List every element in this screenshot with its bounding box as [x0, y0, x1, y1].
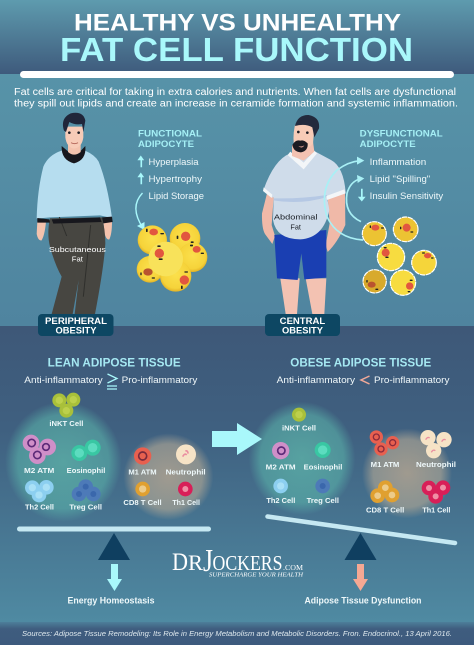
intro text: they spill out lipids and create an increase in ceramide formation and systemic inflammation.: [14, 98, 458, 110]
panel: central obesity figure: [262, 115, 364, 314]
panel: peripheral obesity figure: [37, 113, 113, 314]
list: functional effects: Hyperplasia: [148, 157, 199, 168]
cell: Treg: Treg Cell: [69, 502, 102, 511]
cells: obese: [249, 402, 456, 518]
list: functional effects: [148, 157, 204, 202]
list: dysfunctional effects: Insulin Sensitivity: [370, 191, 443, 202]
logo: DrJockers: J: [203, 542, 213, 578]
cells: lean: [5, 393, 213, 522]
panel: dysfunctional adipocyte: [358, 128, 443, 202]
cell: Th2: [25, 480, 54, 511]
panel: obese adipose tissue: [249, 358, 456, 518]
cell: neutrophil: [166, 444, 206, 476]
cell: neutrophil: Neutrophil: [416, 460, 456, 469]
figure: lean man: [37, 113, 113, 314]
cell: M1 ATM: [128, 447, 157, 476]
heading: functional adipocyte: [138, 128, 202, 150]
cell: neutrophil: [416, 430, 456, 469]
cell: Treg: [69, 479, 102, 511]
cell: Th2: Th2 Cell: [25, 502, 54, 511]
balance text: obese: Anti-inflammatory: [277, 375, 355, 386]
list: dysfunctional effects: Lipid "Spilling": [370, 174, 430, 185]
seesaw: obese tilted: [268, 516, 455, 560]
sources: Sources: Adipose Tissue Remodeling: Its Role in Energy Metabolism and Metabolic Disorders. Fron. Endocrinol., 13 April 2016.: [22, 629, 452, 638]
glow: anti-inflammatory: [249, 402, 355, 515]
cell: Th1: Th1 Cell: [172, 498, 200, 507]
figure: obese man: [262, 115, 346, 314]
badge: central obesity: [265, 314, 340, 336]
badge: peripheral obesity: OBESITY: [56, 326, 96, 336]
arrow: to adipose tissue dysfunction: [353, 564, 368, 591]
panel: functional adipocyte: [136, 128, 204, 230]
panel: lean adipose tissue: [5, 358, 213, 522]
icon: greater than or equal: [107, 374, 117, 389]
footer band: [0, 622, 474, 645]
list: dysfunctional effects: [370, 157, 443, 202]
logo: DrJockers: [172, 542, 304, 578]
cell: Treg: [307, 479, 339, 505]
cell: M1 ATM: M1 ATM: [128, 467, 157, 476]
cell: iNKT: iNKT Cell: [49, 419, 83, 428]
glow: anti-inflammatory: [5, 402, 122, 522]
balance text: lean: [24, 375, 198, 386]
badge: central obesity: OBESITY: [282, 326, 323, 336]
glow: pro-inflammatory: [362, 428, 452, 518]
intro text: Fat cells are critical for taking in extra calories and nutrients. When fat cells are dysfunctional: [14, 87, 456, 98]
icon: up arrow: [138, 173, 144, 184]
list: functional effects: Hypertrophy: [148, 174, 202, 185]
cell: Th1: [172, 482, 200, 507]
list: functional effects: Lipid Storage: [148, 191, 204, 202]
heading: functional adipocyte: ADIPOCYTE: [138, 139, 194, 150]
cell: Th1: [422, 480, 450, 514]
arrow: curved to healthy fat cells: [136, 193, 144, 230]
icon: unhealthy fat cells: [362, 217, 436, 295]
title line 2: FAT CELL FUNCTION: [60, 31, 413, 68]
balance text: lean: Pro-inflammatory: [122, 375, 198, 386]
cell: M2 ATM: M2 ATM: [266, 462, 296, 471]
label: abdominal fat: [274, 213, 318, 231]
cell: CD8 T: [366, 480, 404, 514]
label: abdominal fat: Fat: [290, 222, 301, 231]
cell: iNKT: [49, 393, 83, 428]
balance text: obese: Pro-inflammatory: [374, 375, 450, 386]
cell: M2 ATM: [266, 442, 296, 471]
title line 1: HEALTHY VS UNHEALTHY: [74, 10, 401, 36]
cell: neutrophil: Neutrophil: [166, 467, 206, 476]
icon: up arrow: [138, 156, 144, 167]
cell: M1 ATM: M1 ATM: [371, 460, 399, 469]
cell: CD8 T: [123, 482, 162, 507]
label: adipose tissue dysfunction: Adipose Tissue Dysfunction: [304, 596, 422, 606]
cell: eosinophil: [304, 442, 342, 471]
arrow: lean to obese: [212, 423, 262, 455]
cell: eosinophil: [67, 440, 105, 475]
icon: healthy fat cell cluster: [137, 223, 207, 292]
heading: dysfunctional adipocyte: DYSFUNCTIONAL: [360, 128, 443, 140]
balance text: obese: [277, 375, 450, 386]
logo: DrJockers: OCKERS: [212, 551, 282, 575]
cell: eosinophil: Eosinophil: [67, 466, 105, 475]
label: energy homeostasis: Energy Homeostasis: [68, 596, 154, 606]
cell: Th2: [266, 479, 295, 505]
heading: dysfunctional adipocyte: [360, 128, 443, 150]
logo: DrJockers: .COM: [283, 564, 304, 572]
icon: less than: [361, 376, 370, 384]
title: [60, 10, 413, 68]
heading: obese adipose tissue: OBESE ADIPOSE TISSUE: [290, 358, 432, 370]
badge: peripheral obesity: PERIPHERAL: [45, 316, 108, 326]
cell: iNKT: iNKT Cell: [282, 424, 316, 433]
arrows: fat cells to effects: [324, 161, 363, 240]
cell: Th1: Th1 Cell: [422, 505, 450, 514]
seesaw: lean balanced: [17, 526, 211, 560]
label: subcutaneous fat: [49, 245, 106, 263]
cell: M2 ATM: M2 ATM: [24, 466, 54, 475]
arrow: to energy homeostasis: [107, 564, 122, 591]
intro text: [14, 87, 458, 110]
list: dysfunctional effects: Inflammation: [370, 157, 426, 168]
cell: CD8 T: CD8 T Cell: [123, 498, 162, 507]
logo: DrJockers: R: [188, 550, 203, 575]
heading: lean adipose tissue: LEAN ADIPOSE TISSUE: [48, 358, 181, 370]
icon: down arrow: [358, 189, 365, 201]
cell: Treg: Treg Cell: [307, 496, 339, 505]
logo: DrJockers: D: [172, 549, 188, 576]
badge: peripheral obesity: [38, 314, 114, 336]
cell: Th2: Th2 Cell: [266, 496, 295, 505]
balance text: lean: Anti-inflammatory: [24, 375, 103, 386]
label: subcutaneous fat: Fat: [72, 254, 84, 263]
logo: DrJockers: SUPERCHARGE YOUR HEALTH: [209, 572, 304, 578]
heading: dysfunctional adipocyte: ADIPOCYTE: [360, 139, 416, 150]
label: abdominal fat: Abdominal: [274, 213, 318, 222]
heading: functional adipocyte: FUNCTIONAL: [138, 128, 202, 140]
cell: M2 ATM: [23, 435, 56, 475]
title divider bar: [20, 71, 454, 78]
cell: M1 ATM: [370, 430, 399, 469]
label: subcutaneous fat: Subcutaneous: [49, 245, 106, 254]
cell: iNKT: [282, 408, 316, 433]
cell: CD8 T: CD8 T Cell: [366, 505, 404, 514]
cell: eosinophil: Eosinophil: [304, 462, 342, 471]
badge: central obesity: CENTRAL: [280, 316, 326, 326]
glow: pro-inflammatory: [123, 433, 213, 520]
